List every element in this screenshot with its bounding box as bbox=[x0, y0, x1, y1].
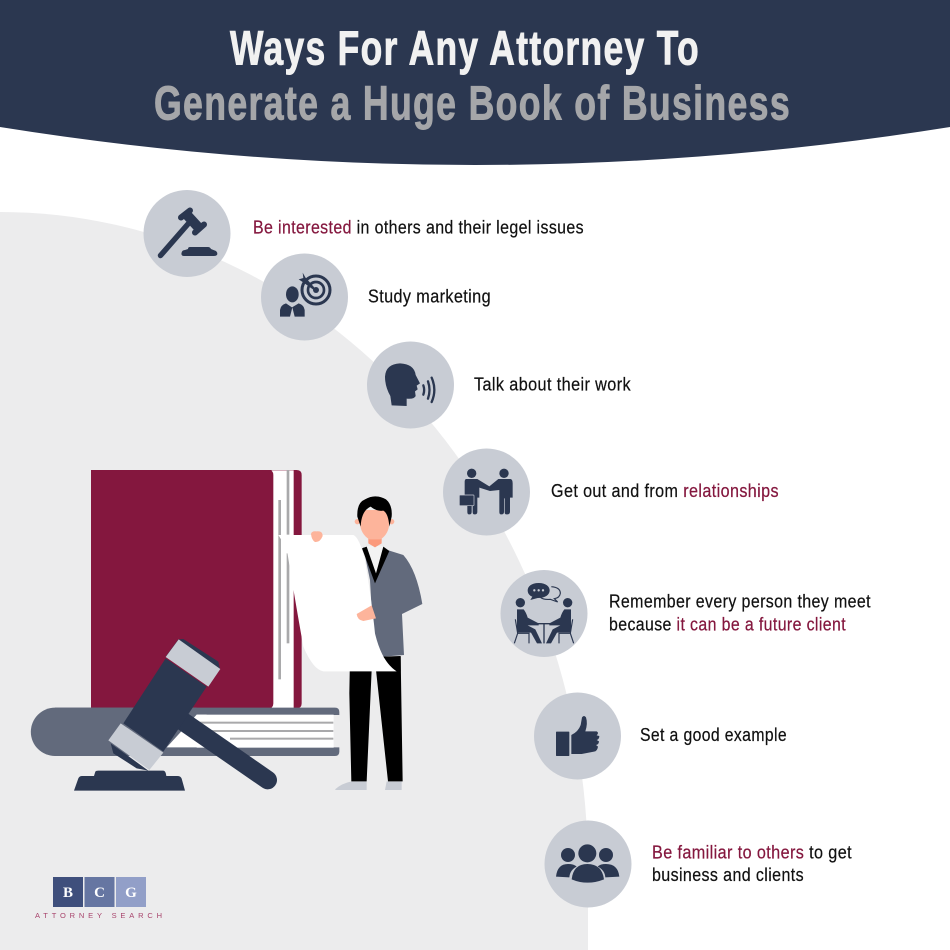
text: because it can be a future client bbox=[609, 614, 846, 634]
item 6: set a good example bbox=[534, 692, 787, 780]
lawyer figure bbox=[278, 496, 422, 790]
hands bbox=[311, 531, 376, 621]
text: Remember every person they meet bbox=[609, 590, 871, 612]
logo: BCG Attorney Search: B bbox=[63, 885, 73, 901]
face bbox=[360, 510, 389, 539]
logo: BCG Attorney Search: ATTORNEY SEARCH bbox=[35, 911, 162, 920]
icon: handshake bbox=[443, 448, 530, 536]
shoes bbox=[335, 781, 402, 790]
scroll bbox=[278, 535, 397, 671]
text: Be interested in others and their legel issues bbox=[253, 216, 584, 238]
background curved panel bbox=[0, 212, 588, 950]
item 3: talk about their work bbox=[367, 342, 631, 428]
icon: thumbs up bbox=[534, 692, 621, 780]
title line 1: Ways For Any Attorney To bbox=[230, 22, 700, 76]
text: Study marketing bbox=[368, 286, 491, 306]
large gavel bbox=[74, 639, 268, 791]
text: Be familiar to others to get bbox=[652, 842, 852, 862]
text: Talk about their work bbox=[474, 374, 631, 394]
item 4: relationships bbox=[443, 448, 779, 536]
logo: BCG Attorney Search: G bbox=[125, 885, 137, 901]
icon: group of people bbox=[544, 820, 632, 908]
text: business and clients bbox=[652, 864, 804, 885]
lying book bbox=[31, 708, 339, 756]
text bbox=[609, 590, 871, 634]
item 1: be interested bbox=[144, 190, 584, 277]
icon: speaking head bbox=[367, 342, 454, 428]
jacket bbox=[363, 547, 422, 657]
item 2: study marketing bbox=[261, 254, 491, 340]
text: Set a good example bbox=[640, 724, 787, 745]
trousers bbox=[349, 657, 403, 781]
lapels bbox=[362, 547, 389, 583]
item 5: remember every person bbox=[500, 570, 871, 657]
text: Get out and from relationships bbox=[551, 480, 779, 501]
icon: meeting at table bbox=[500, 570, 588, 657]
upright book bbox=[91, 470, 302, 708]
text bbox=[652, 842, 852, 885]
item 7: be familiar to others bbox=[544, 820, 852, 908]
header banner bbox=[0, 0, 950, 165]
logo: BCG Attorney Search: C bbox=[94, 885, 105, 901]
logo: BCG Attorney Search bbox=[35, 877, 162, 920]
shirt bbox=[367, 546, 383, 581]
icon: target and person bbox=[261, 254, 348, 340]
hair bbox=[357, 496, 392, 527]
neck bbox=[368, 535, 382, 547]
illustration: book, gavel and lawyer bbox=[31, 470, 422, 791]
icon: gavel bbox=[144, 190, 230, 277]
